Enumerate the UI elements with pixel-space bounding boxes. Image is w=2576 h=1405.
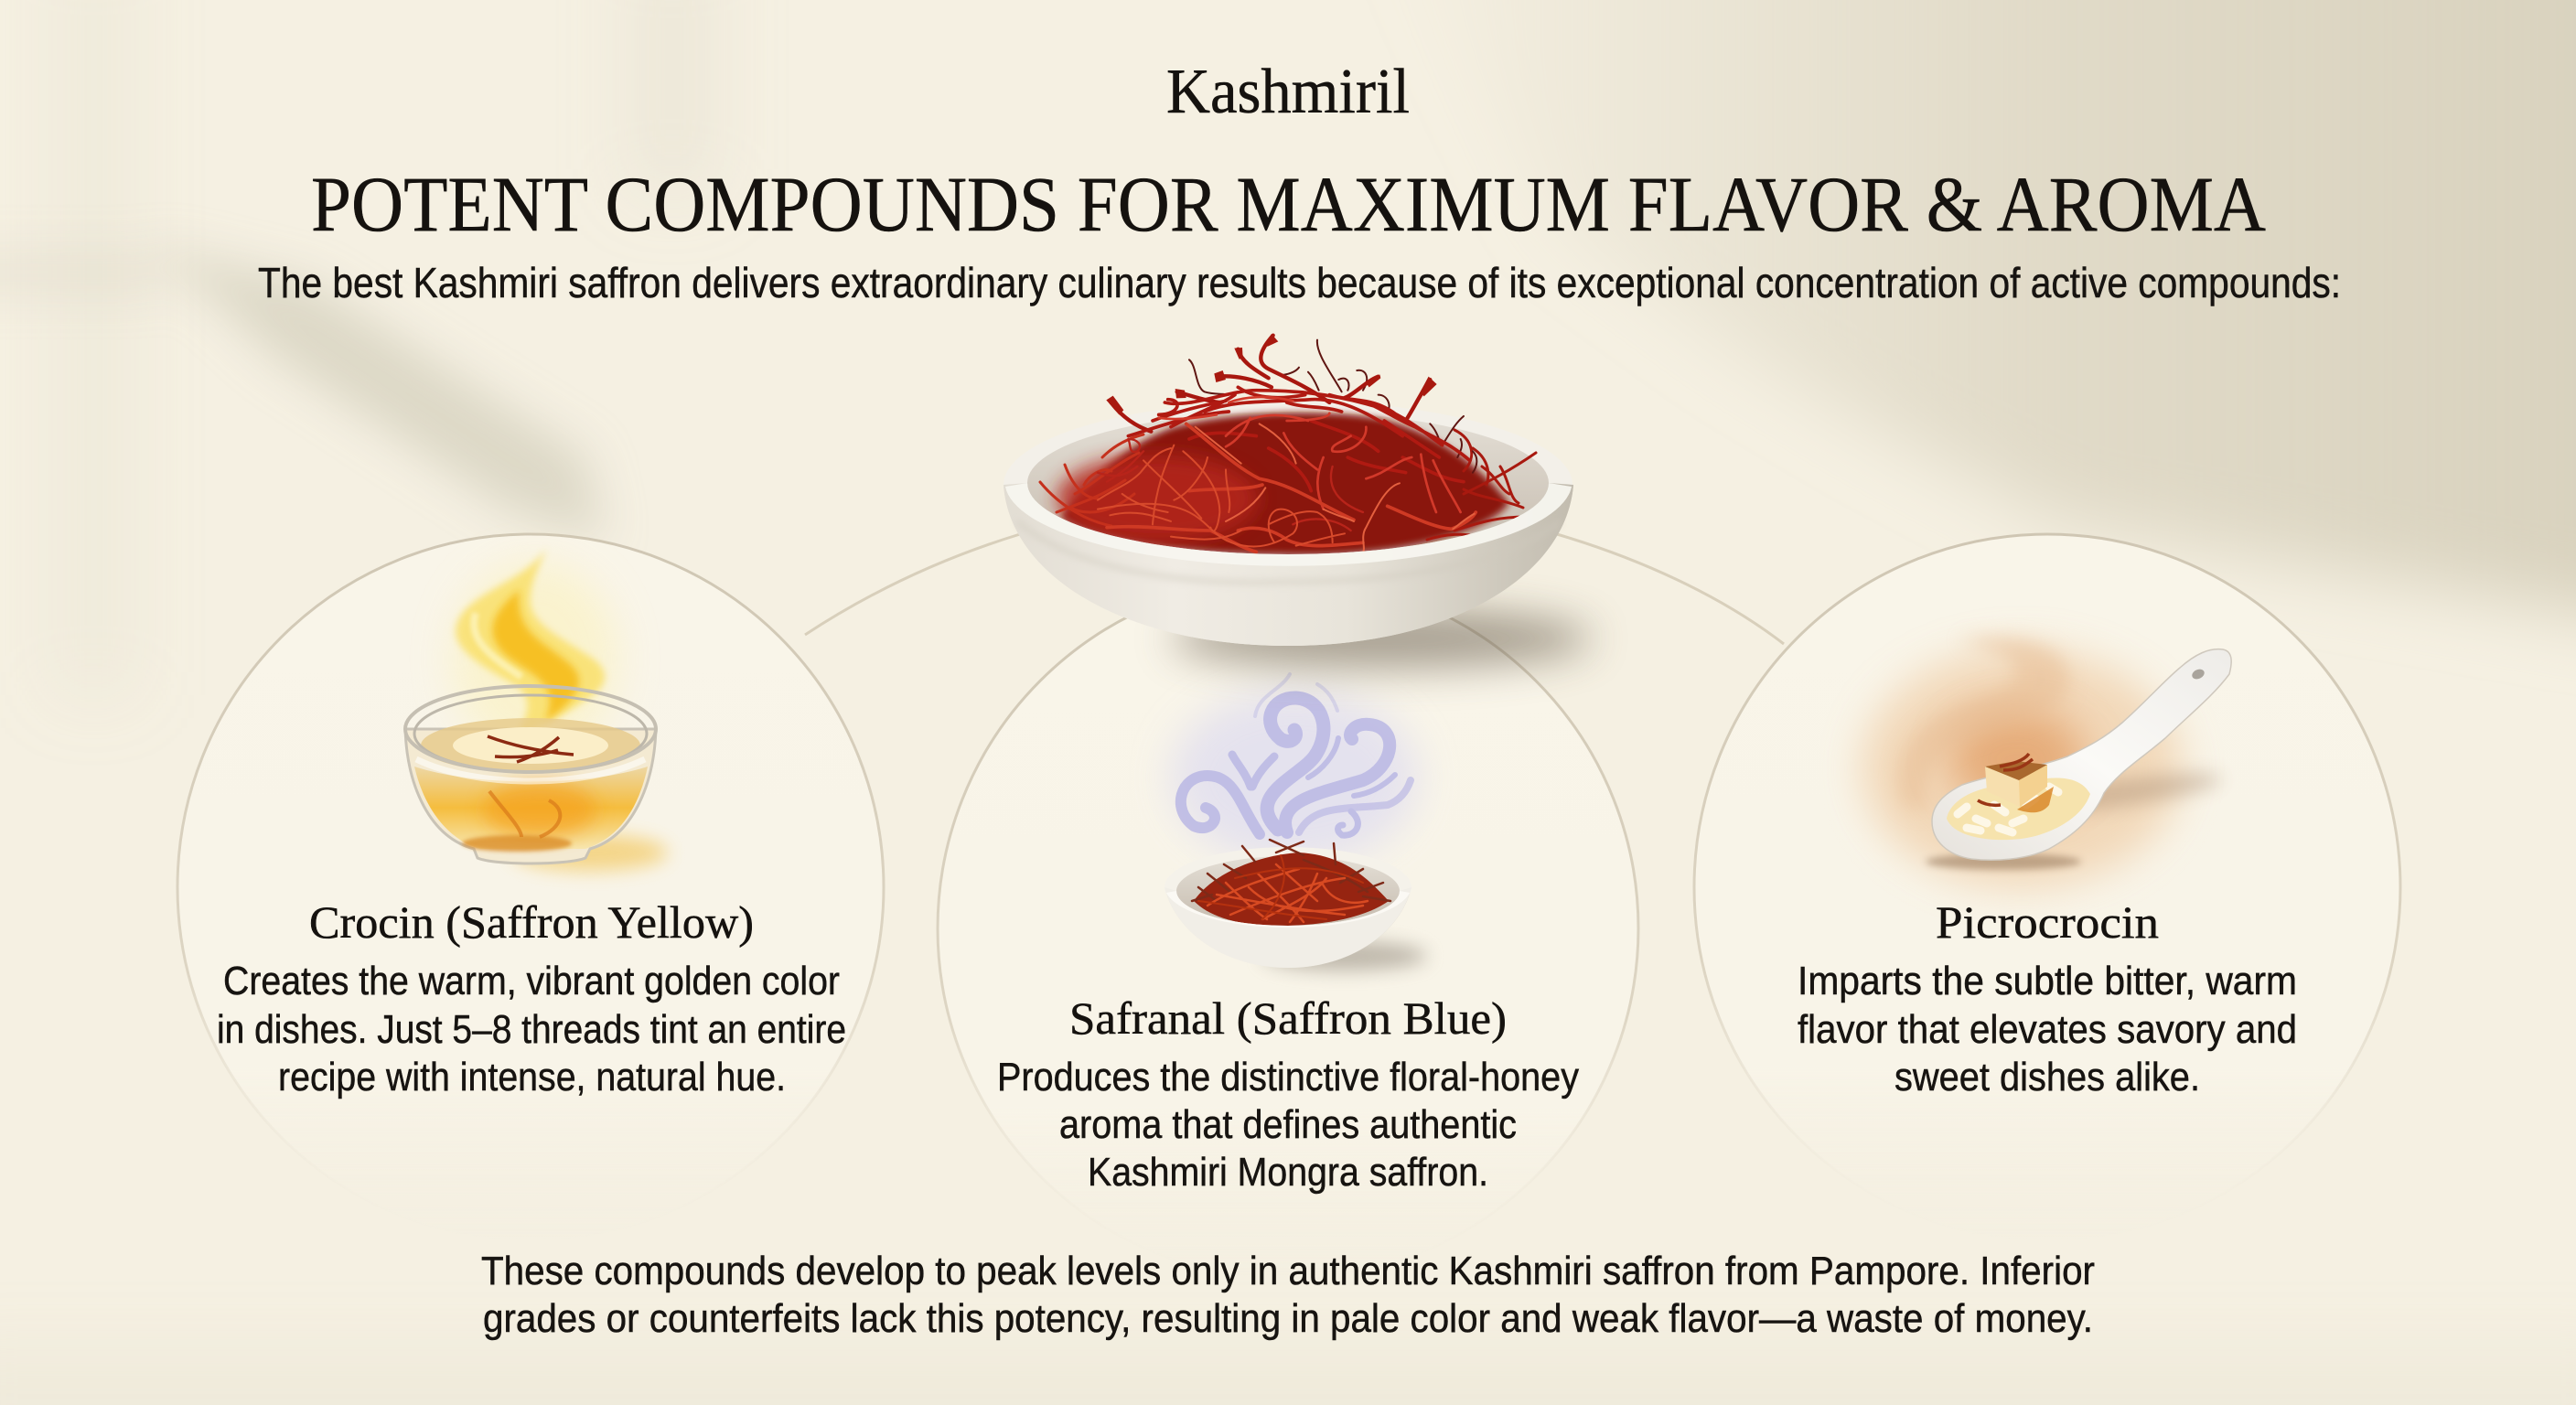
intro text: The best Kashmiri saffron delivers extraordinary culinary results because of its exceptional concentration of active compounds:	[258, 259, 2341, 306]
footer note: These compounds develop to peak levels only in authentic Kashmiri saffron from Pampore. Inferior	[481, 1249, 2095, 1293]
rice	[1947, 778, 2090, 840]
text: safranal description: Kashmiri Mongra saffron.	[1088, 1150, 1488, 1195]
text: picrocrocin description: flavor that elevates savory and	[1798, 1007, 2297, 1052]
text: picrocrocin description: sweet dishes alike.	[1894, 1055, 2200, 1099]
footer note: grades or counterfeits lack this potency, resulting in pale color and weak flavor—a waste of money.	[483, 1296, 2093, 1341]
heading: crocin: Crocin (Saffron Yellow)	[309, 896, 754, 948]
icon: small bowl with lavender aroma	[1165, 674, 1427, 971]
text: picrocrocin description	[1798, 959, 2297, 1099]
text: crocin description: Creates the warm, vibrant golden color	[223, 959, 840, 1003]
icon: glass bowl with golden steam	[405, 549, 668, 871]
icon: main bowl of saffron threads	[1004, 334, 1592, 668]
connector arcs from bowl to circles	[805, 534, 1784, 644]
text: picrocrocin description: Imparts the subtle bitter, warm	[1798, 959, 2297, 1003]
text: crocin description: in dishes. Just 5–8 threads tint an entire	[217, 1007, 846, 1052]
icon: spoon with saffron rice and custard	[1862, 637, 2231, 887]
bowl front	[1004, 483, 1573, 646]
panel: crocin	[177, 534, 884, 1240]
panel: picrocrocin	[1694, 534, 2400, 1240]
text: crocin description: recipe with intense, natural hue.	[278, 1055, 786, 1099]
title: brand name: Kashmiril	[1166, 57, 1410, 127]
outer threads left	[1040, 434, 1143, 549]
panel: safranal	[938, 578, 1638, 1279]
footer note	[481, 1249, 2095, 1341]
text: safranal description: aroma that defines authentic	[1059, 1102, 1517, 1147]
custard cube	[1985, 764, 2047, 807]
heading: POTENT COMPOUNDS FOR MAXIMUM FLAVOR & AROMA	[311, 160, 2266, 248]
text: crocin description	[217, 959, 846, 1099]
heading: picrocrocin: Picrocrocin	[1936, 896, 2159, 948]
text: safranal description: Produces the distinctive floral-honey	[997, 1055, 1579, 1099]
saffron mound	[1040, 334, 1536, 555]
outer threads right	[1427, 430, 1536, 540]
glass bowl	[405, 729, 656, 863]
spoon	[1932, 649, 2231, 860]
heading: safranal: Safranal (Saffron Blue)	[1069, 992, 1507, 1044]
text: safranal description	[997, 1055, 1579, 1195]
thread tips	[1106, 334, 1437, 414]
small bowl	[1165, 887, 1411, 968]
